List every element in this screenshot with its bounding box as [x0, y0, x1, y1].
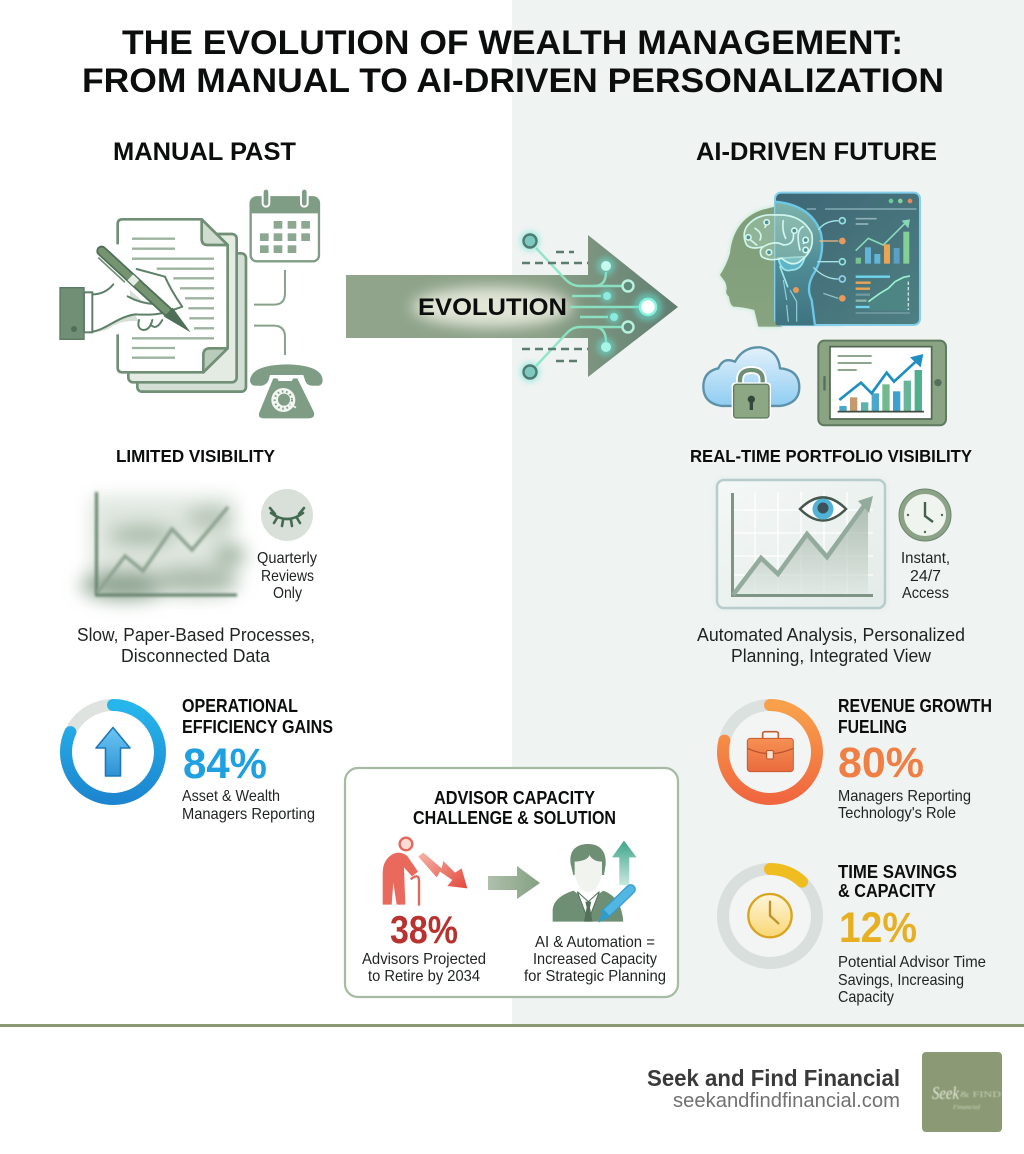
heading: manual past: MANUAL PAST [113, 138, 296, 166]
brand url: seekandfindfinancial.com [673, 1090, 900, 1112]
text: advisors projected [362, 951, 486, 985]
dashboard contents [807, 199, 917, 313]
donut: 80 percent [723, 705, 817, 799]
icon: ai head with dashboard [720, 193, 920, 327]
brand name: Seek and Find Financial [647, 1065, 900, 1091]
metric: operational efficiency gains: Asset & Wealth [182, 788, 280, 805]
icon: briefcase [747, 732, 793, 772]
icon: calendar [251, 192, 319, 261]
text: instant 24/7 access: Access [902, 585, 949, 602]
icon: wall clock [899, 489, 951, 541]
circuit traces [536, 248, 640, 366]
text: instant 24/7 access: 24/7 [910, 568, 941, 585]
metric: revenue growth fueling: Managers Reporting [838, 788, 971, 805]
metric: revenue growth fueling: Technology's Role [838, 805, 956, 822]
logo [922, 1052, 1002, 1132]
icon: clock [748, 894, 792, 937]
panel: right background [512, 0, 1024, 1024]
text: automated analysis: Planning, Integrated View [731, 646, 932, 666]
chart: real-time portfolio [715, 478, 887, 610]
metric: operational efficiency gains [66, 695, 333, 823]
logo: Financial [952, 1104, 980, 1111]
text: ai and automation: for Strategic Planning [524, 968, 666, 985]
heading: real-time portfolio visibility: REAL-TIME PORTFOLIO VISIBILITY [690, 446, 972, 466]
icon: closed eye [261, 489, 313, 541]
circuit nodes [520, 231, 662, 382]
metric: time savings and capacity [723, 861, 986, 1006]
heading: limited visibility: LIMITED VISIBILITY [116, 446, 275, 466]
metric: time savings and capacity: Potential Advisor Time [838, 954, 986, 971]
icon: rotary telephone [250, 364, 323, 418]
metric: revenue growth fueling: 80% [838, 739, 924, 787]
title: FROM MANUAL TO AI-DRIVEN PERSONALIZATION [82, 62, 944, 100]
metric: revenue growth fueling [723, 695, 992, 822]
arrow label: EVOLUTION [418, 294, 567, 321]
text: ai and automation: Increased Capacity [533, 951, 657, 968]
metric: operational efficiency gains: EFFICIENCY GAINS [182, 716, 333, 737]
metric: revenue growth fueling: FUELING [838, 716, 907, 737]
text: advisors projected: to Retire by 2034 [368, 968, 480, 985]
big number: 38 percent: 38% [390, 909, 458, 952]
text: automated analysis [697, 625, 965, 666]
logo: Seek [932, 1083, 960, 1103]
text: quarterly reviews only: Quarterly [257, 550, 317, 567]
title [82, 24, 944, 100]
panel: advisor capacity challenge and solution: ADVISOR CAPACITY [434, 788, 595, 808]
title: THE EVOLUTION OF WEALTH MANAGEMENT: [122, 24, 903, 62]
icon: cloud with padlock [703, 347, 799, 420]
icon: advisor with pen and up arrow [553, 841, 637, 923]
text: quarterly reviews only: Reviews [261, 568, 314, 585]
text: ai and automation: AI & Automation = [535, 934, 655, 951]
donut: 84 percent [66, 705, 160, 799]
icon: open eye [800, 498, 846, 520]
metric: time savings and capacity: Capacity [838, 989, 894, 1006]
text: ai and automation [524, 934, 666, 985]
text: slow paper-based processes: Disconnected Data [121, 646, 271, 666]
text: advisors projected: Advisors Projected [362, 951, 486, 968]
text: instant 24/7 access [901, 550, 950, 602]
icon: paper documents [118, 219, 246, 392]
metric: operational efficiency gains: 84% [183, 740, 267, 788]
text: quarterly reviews only [257, 550, 317, 602]
brain [744, 215, 812, 287]
arrow: challenge to solution [488, 866, 540, 899]
arrow: evolution [346, 231, 678, 382]
donut: 12 percent [723, 869, 817, 963]
footer [0, 1024, 1024, 1154]
text: instant 24/7 access: Instant, [901, 550, 950, 567]
logo: & FIND [960, 1090, 1001, 1099]
head overlap in panel [775, 202, 822, 325]
metric: operational efficiency gains: OPERATIONAL [182, 695, 298, 716]
metric: revenue growth fueling: REVENUE GROWTH [838, 695, 992, 716]
heading: ai-driven future: AI-DRIVEN FUTURE [696, 138, 937, 166]
panel: advisor capacity challenge and solution [345, 768, 678, 997]
chart: blurred line chart [81, 492, 246, 600]
metric: time savings and capacity: & CAPACITY [838, 880, 937, 901]
text glow [412, 287, 572, 327]
metric: time savings and capacity: TIME SAVINGS [838, 861, 957, 882]
text: slow paper-based processes [77, 625, 315, 666]
metric: operational efficiency gains: Managers Reporting [182, 806, 315, 823]
metric: time savings and capacity: Savings, Increasing [838, 972, 964, 989]
metric: time savings and capacity: 12% [839, 904, 917, 952]
icon: retiring advisor with falling arrow [383, 838, 467, 906]
text: slow paper-based processes: Slow, Paper-Based Processes, [77, 625, 315, 645]
text: automated analysis: Automated Analysis, Personalized [697, 625, 965, 645]
icon: tablet with growth chart [818, 341, 946, 425]
connector lines [254, 270, 285, 355]
panel: advisor capacity challenge and solution: CHALLENGE & SOLUTION [413, 808, 616, 828]
icon: hand writing with pen [60, 244, 191, 339]
text: quarterly reviews only: Only [273, 585, 302, 602]
